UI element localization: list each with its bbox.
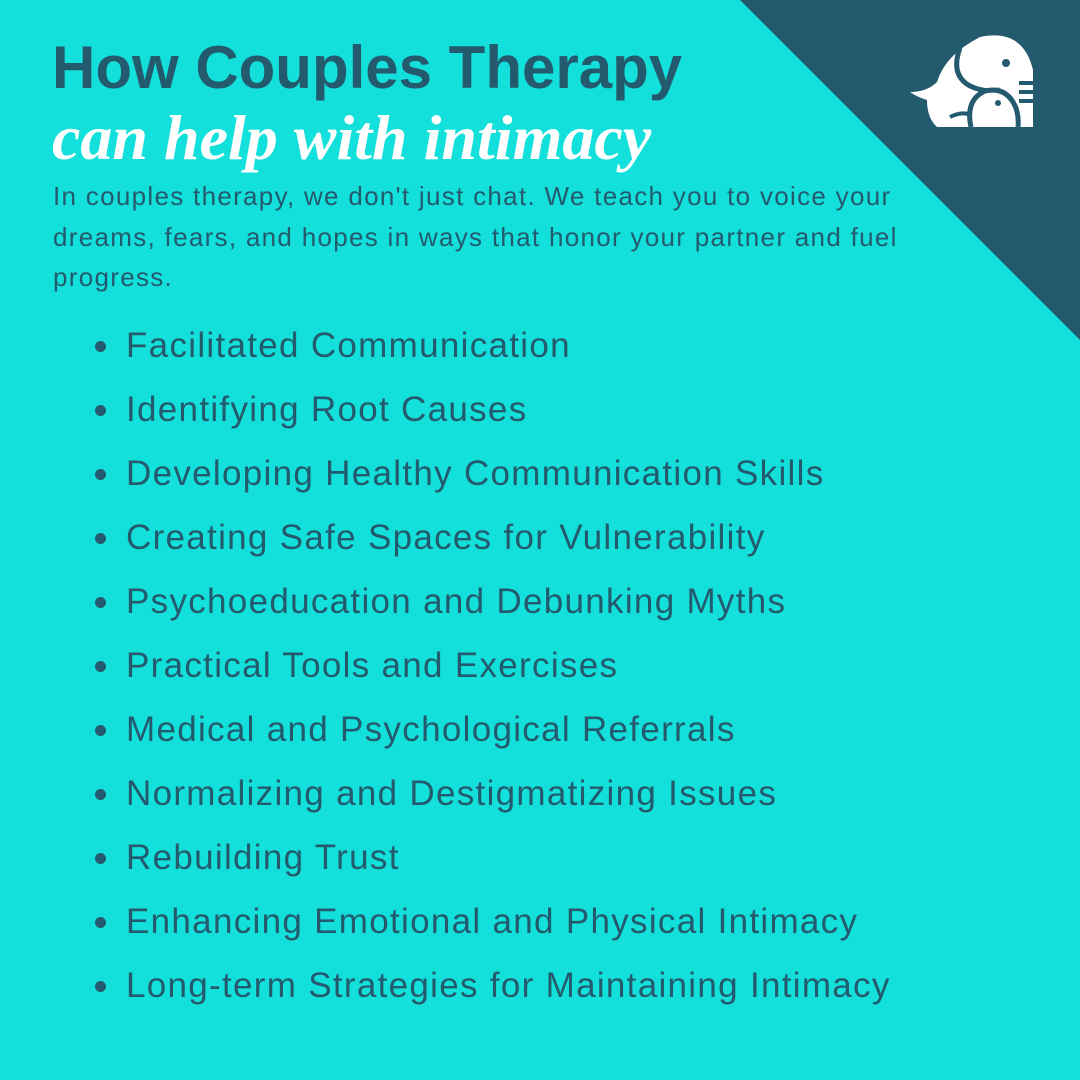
bullet list: Psychoeducation and Debunking Myths <box>126 582 786 621</box>
bullet list: Creating Safe Spaces for Vulnerability <box>126 518 766 557</box>
bullet list: Practical Tools and Exercises <box>126 646 618 685</box>
subtitle: can help with intimacy <box>52 102 651 173</box>
bullet list: Long-term Strategies for Maintaining Intimacy <box>126 966 891 1005</box>
bullet list: Developing Healthy Communication Skills <box>126 454 824 493</box>
bullet list <box>95 326 891 1005</box>
bullet list: Rebuilding Trust <box>126 838 400 877</box>
bullet list: Enhancing Emotional and Physical Intimacy <box>126 902 858 941</box>
title: How Couples Therapy <box>52 34 682 101</box>
bullet list: Facilitated Communication <box>126 326 571 365</box>
intro paragraph: In couples therapy, we don't just chat. We teach you to voice your dreams, fears, and hopes in ways that honor your partner and fuel progress. <box>53 181 898 292</box>
bullet list: Identifying Root Causes <box>126 390 528 429</box>
icon: elephant logo <box>910 35 1033 127</box>
bullet list: Normalizing and Destigmatizing Issues <box>126 774 777 813</box>
bullet list: Medical and Psychological Referrals <box>126 710 736 749</box>
